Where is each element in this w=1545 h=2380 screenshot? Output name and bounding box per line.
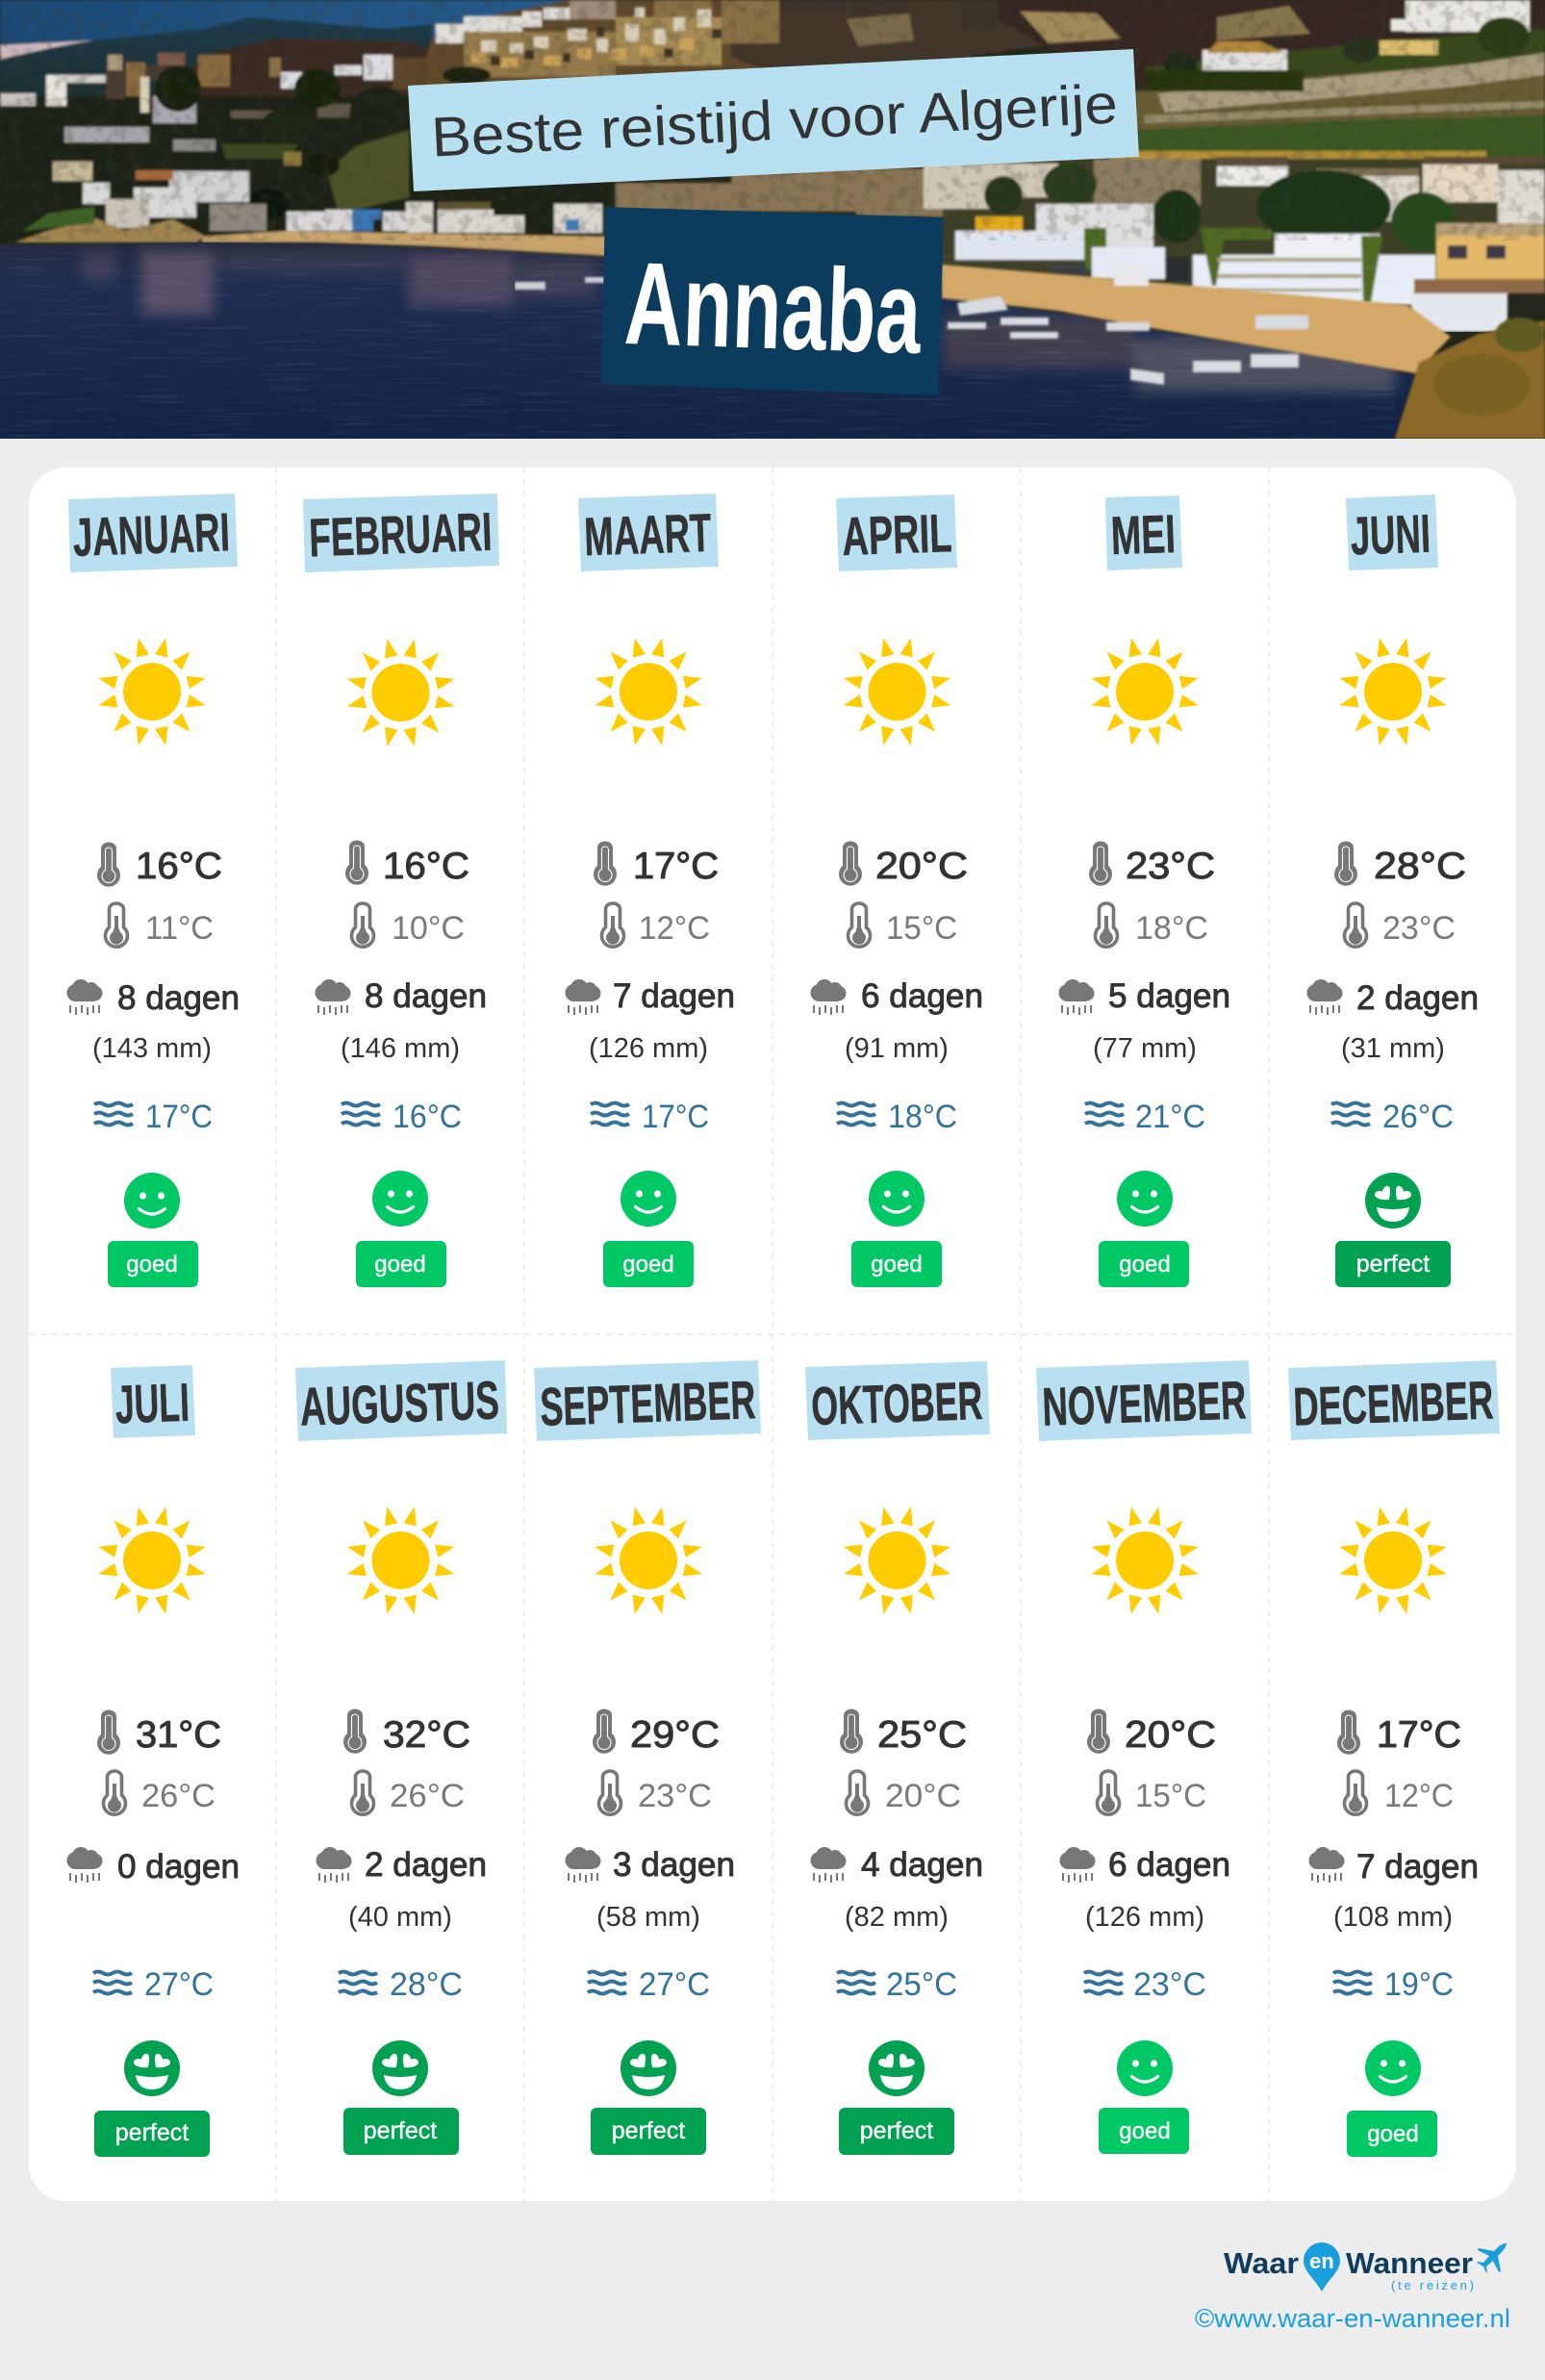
- rain days: 6 dagen: [861, 977, 983, 1015]
- max temperature: [839, 842, 968, 887]
- rainfall: (126 mm): [589, 1033, 708, 1064]
- banner: city title: Annaba: [622, 238, 924, 378]
- min temperature: [1097, 1771, 1206, 1814]
- sea temperature: 21°C: [1135, 1099, 1205, 1135]
- slope: [327, 130, 409, 214]
- min temperature: [1095, 903, 1208, 947]
- town top: [436, 8, 570, 43]
- month label juli: JULI: [114, 1372, 190, 1434]
- icon: sun: [348, 1507, 454, 1613]
- rating: perfect: [839, 2040, 954, 2155]
- month label mei: MEI: [1110, 503, 1177, 566]
- month: februari: [303, 494, 499, 1287]
- month label maart: MAART: [583, 502, 712, 567]
- month: november: [1036, 1360, 1252, 2154]
- month label februari: [303, 494, 499, 572]
- rainfall: (31 mm): [1341, 1033, 1445, 1064]
- rain days: 4 dagen: [861, 1846, 983, 1884]
- rating: goed: goed: [622, 1252, 674, 1278]
- rain days: 6 dagen: [1108, 1846, 1230, 1884]
- max temperature: 17°C: [633, 846, 719, 887]
- rating: goed: [1347, 2040, 1437, 2157]
- min temperature: 11°C: [145, 910, 214, 947]
- rating: goed: goed: [1119, 2118, 1171, 2144]
- sea temperature: [591, 1099, 709, 1135]
- logo: Waar en Wanneer: (te reizen): [1391, 2278, 1474, 2292]
- rainfall: (146 mm): [341, 1033, 460, 1064]
- min temperature: [598, 1771, 712, 1814]
- rating: goed: [1099, 1171, 1189, 1287]
- rating: perfect: perfect: [364, 2117, 437, 2144]
- icon: sun: [595, 639, 701, 745]
- rain days: [1308, 1847, 1479, 1886]
- sea temperature: 17°C: [642, 1099, 709, 1135]
- max temperature: 23°C: [1126, 846, 1215, 887]
- max temperature: 28°C: [1374, 846, 1466, 887]
- sea temperature: [837, 1099, 957, 1135]
- month: december: [1288, 1360, 1500, 2157]
- sea temperature: [342, 1099, 462, 1135]
- rating: goed: [603, 1171, 694, 1287]
- rainfall: (91 mm): [845, 1033, 949, 1064]
- min temperature: [848, 903, 957, 947]
- rating: perfect: [591, 2040, 706, 2155]
- hillside texture: [0, 0, 1545, 241]
- month label september: [534, 1360, 761, 1441]
- month label februari: FEBRUARI: [308, 501, 493, 568]
- rating: perfect: perfect: [860, 2117, 933, 2144]
- month label augustus: AUGUSTUS: [299, 1369, 500, 1437]
- min temperature: 26°C: [141, 1778, 215, 1814]
- rating: goed: [356, 1171, 446, 1287]
- rating: perfect: [1335, 1173, 1451, 1287]
- max temperature: [98, 843, 222, 887]
- month: juli: [67, 1365, 240, 2157]
- rating: perfect: [343, 2040, 459, 2155]
- sea temperature: 27°C: [144, 1966, 214, 2003]
- month: augustus: [295, 1360, 507, 2155]
- month label november: NOVEMBER: [1041, 1369, 1247, 1437]
- banner: subtitle: Beste reistijd voor Algerije: [430, 72, 1119, 169]
- sea temperature: [339, 1966, 463, 2003]
- month: januari: [67, 494, 240, 1287]
- banner: city title: [601, 207, 944, 395]
- rating: goed: [1099, 2040, 1189, 2154]
- icon: sun: [845, 1507, 950, 1613]
- rating: goed: [851, 1171, 942, 1287]
- sea temperature: [1085, 1099, 1205, 1135]
- month label juli: [111, 1365, 195, 1438]
- icon: sun: [1340, 1507, 1446, 1613]
- shoreline houses: [53, 162, 92, 181]
- min temperature: [106, 903, 214, 947]
- logo: Waar en Wanneer: [1224, 2242, 1508, 2292]
- max temperature: 16°C: [383, 846, 469, 887]
- min temperature: [602, 903, 710, 947]
- sea temperature: 18°C: [888, 1099, 957, 1135]
- min temperature: 12°C: [639, 910, 710, 947]
- rainfall: (77 mm): [1093, 1033, 1197, 1064]
- website url: ©www.waar-en-wanneer.nl: [1195, 2304, 1510, 2333]
- max temperature: [98, 1710, 221, 1756]
- rain days: 0 dagen: [117, 1848, 240, 1886]
- logo: Waar en Wanneer: Wanneer: [1346, 2246, 1473, 2280]
- icon: sun: [1092, 1507, 1198, 1613]
- min temperature: 23°C: [638, 1778, 712, 1814]
- min temperature: 12°C: [1384, 1778, 1454, 1814]
- sea temperature: 27°C: [639, 1966, 710, 2003]
- rain days: 3 dagen: [613, 1846, 735, 1884]
- min temperature: [352, 903, 465, 947]
- max temperature: 25°C: [877, 1714, 967, 1756]
- month: juni: [1306, 494, 1479, 1287]
- water ripples: [0, 252, 1395, 439]
- month label januari: [68, 494, 238, 572]
- min temperature: 15°C: [1135, 1778, 1206, 1814]
- bush: [1395, 320, 1545, 439]
- sea temperature: [1331, 1099, 1454, 1135]
- sea temperature: 28°C: [390, 1966, 463, 2003]
- rain days: 8 dagen: [365, 977, 487, 1015]
- sea temperature: [837, 1966, 957, 2003]
- rating: goed: goed: [1367, 2121, 1419, 2147]
- rainfall: (108 mm): [1333, 1902, 1453, 1933]
- month label september: SEPTEMBER: [539, 1369, 756, 1437]
- max temperature: [595, 842, 719, 887]
- rainfall: (40 mm): [348, 1902, 452, 1933]
- rainfall: (126 mm): [1085, 1902, 1204, 1933]
- min temperature: 26°C: [390, 1778, 465, 1814]
- min temperature: [104, 1771, 215, 1814]
- rainfall: (143 mm): [92, 1033, 212, 1064]
- month label juni: [1346, 494, 1438, 570]
- hero photo: Annaba bay: [0, 0, 1545, 439]
- top right villa and house: [1391, 0, 1530, 32]
- min temperature: 18°C: [1135, 910, 1208, 947]
- sea temperature: 16°C: [393, 1099, 462, 1135]
- max temperature: 16°C: [136, 846, 222, 887]
- sea temperature: 23°C: [1133, 1966, 1206, 2003]
- sea temperature: 26°C: [1382, 1099, 1454, 1135]
- rating: perfect: perfect: [1356, 1251, 1430, 1278]
- rain days: 7 dagen: [1356, 1848, 1479, 1886]
- sea temperature: 17°C: [145, 1099, 213, 1135]
- month: mei: [1058, 495, 1230, 1287]
- min temperature: 23°C: [1382, 910, 1456, 947]
- min temperature: [1345, 1771, 1454, 1814]
- icon: sun: [1092, 639, 1198, 745]
- max temperature: 31°C: [136, 1714, 221, 1756]
- max temperature: [1087, 1709, 1216, 1756]
- rating: goed: goed: [871, 1252, 923, 1278]
- rain days: 2 dagen: [1356, 979, 1479, 1017]
- icon: sun: [348, 640, 454, 746]
- month label april: [836, 494, 957, 571]
- rating: perfect: [94, 2040, 210, 2157]
- month label oktober: [805, 1361, 990, 1440]
- month: april: [810, 494, 983, 1287]
- rating: goed: [108, 1173, 198, 1287]
- logo: Waar en Wanneer: Waar: [1224, 2246, 1299, 2280]
- month label april: APRIL: [841, 502, 952, 567]
- month label oktober: OKTOBER: [810, 1370, 983, 1436]
- rating: perfect: perfect: [612, 2117, 685, 2144]
- month: maart: [566, 494, 735, 1287]
- rain days: 5 dagen: [1108, 977, 1230, 1015]
- sand: [942, 265, 1451, 373]
- sea temperature: [94, 1099, 213, 1135]
- rainfall: (82 mm): [845, 1902, 949, 1933]
- houses behind banner right: [616, 164, 943, 216]
- max temperature: 20°C: [1125, 1714, 1216, 1756]
- min temperature: 20°C: [885, 1778, 961, 1814]
- max temperature: 29°C: [630, 1714, 720, 1756]
- max temperature: [1089, 842, 1215, 887]
- trees: [155, 65, 201, 112]
- icon: sun: [1340, 639, 1446, 745]
- month label november: [1036, 1360, 1252, 1441]
- max temperature: [841, 1709, 967, 1756]
- max temperature: [1337, 1710, 1461, 1756]
- rain days: 8 dagen: [117, 979, 240, 1017]
- month label mei: [1105, 495, 1182, 570]
- month label maart: [578, 494, 719, 571]
- rating: perfect: perfect: [115, 2119, 189, 2146]
- banner: subtitle: [408, 49, 1139, 191]
- month label augustus: [295, 1360, 507, 1441]
- min temperature: 10°C: [392, 910, 465, 947]
- logo: Waar en Wanneer: en: [1309, 2249, 1334, 2273]
- sea temperature: [1333, 1966, 1454, 2003]
- rating: goed: goed: [126, 1252, 178, 1278]
- max temperature: [346, 841, 469, 887]
- left town: [108, 55, 122, 70]
- rating: goed: goed: [374, 1252, 426, 1278]
- month label juni: JUNI: [1350, 503, 1431, 566]
- max temperature: 32°C: [383, 1714, 470, 1756]
- icon: sun: [595, 1507, 701, 1613]
- panel: climate table card: [29, 468, 1516, 2201]
- rain days: [67, 1847, 240, 1886]
- sea temperature: [588, 1966, 710, 2003]
- rain days: 2 dagen: [365, 1846, 487, 1884]
- rating: goed: goed: [1119, 1252, 1171, 1278]
- buildings mid right: [1036, 204, 1153, 247]
- max temperature: 17°C: [1377, 1714, 1461, 1756]
- rocks: [15, 218, 204, 242]
- icon: sun: [845, 639, 950, 745]
- min temperature: [847, 1771, 961, 1814]
- sea temperature: [1084, 1966, 1206, 2003]
- sea temperature: 19°C: [1384, 1966, 1454, 2003]
- water: [0, 242, 1415, 439]
- min temperature: [1345, 903, 1456, 947]
- icon: sun: [99, 639, 205, 745]
- month: oktober: [805, 1361, 990, 2155]
- hill terraces right: [1145, 29, 1545, 96]
- beach left: [202, 231, 606, 256]
- max temperature: [593, 1709, 720, 1756]
- icon: sun: [99, 1507, 205, 1613]
- rainfall: (58 mm): [596, 1902, 700, 1933]
- min temperature: 15°C: [886, 910, 957, 947]
- sea temperature: [93, 1966, 214, 2003]
- month label januari: JANUARI: [72, 501, 231, 568]
- month: september: [534, 1360, 761, 2155]
- max temperature: [344, 1709, 470, 1756]
- rain days: 7 dagen: [613, 977, 735, 1015]
- max temperature: 20°C: [875, 846, 968, 887]
- max temperature: [1335, 842, 1466, 887]
- sea temperature: 25°C: [886, 1966, 957, 2003]
- min temperature: [352, 1771, 465, 1814]
